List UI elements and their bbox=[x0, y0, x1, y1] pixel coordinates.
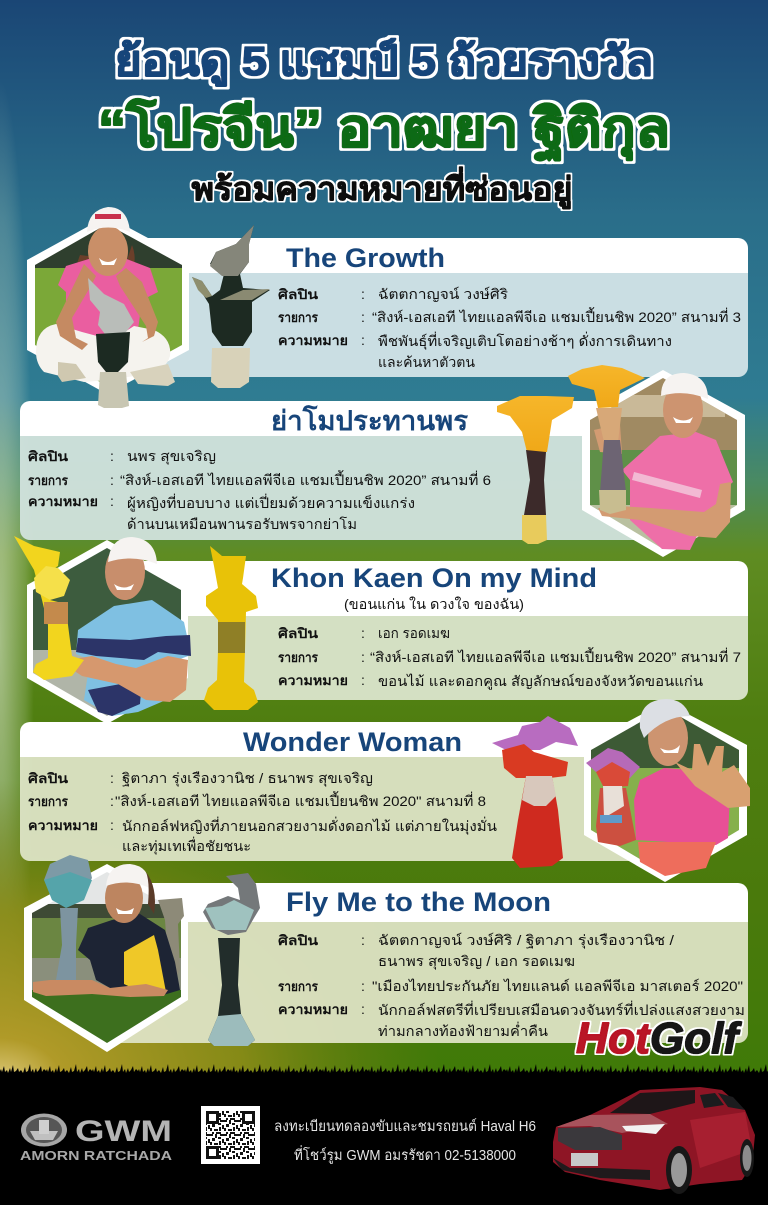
logo: GWM Amorn Ratchada: AMORN RATCHADA bbox=[20, 1149, 172, 1163]
details: : bbox=[361, 978, 365, 994]
details: ความหมาย bbox=[278, 1002, 348, 1017]
registration text: ที่โชว์รูม GWM อมรรัชดา 02-5138000 bbox=[294, 1145, 516, 1164]
details: “สิงห์-เอสเอที ไทยแอลพีจีเอ แชมเปี้ยนชิพ 2020” สนามที่ 3 bbox=[372, 307, 741, 325]
photo: golfer seated with trophy bbox=[27, 207, 189, 408]
details: : bbox=[110, 448, 114, 464]
registration text: ลงทะเบียนทดลองขับและชมรถยนต์ Haval H6 bbox=[274, 1118, 536, 1135]
subheading: (ขอนแก่น ใน ดวงใจ ของฉัน) bbox=[344, 596, 524, 612]
details: ศิลปิน bbox=[278, 287, 319, 302]
details: รายการ bbox=[278, 650, 319, 665]
panel: Khon Kaen On my Mind bbox=[110, 561, 748, 700]
details: : bbox=[361, 309, 365, 325]
details: และทุ่มเทเพื่อชัยชนะ bbox=[122, 837, 251, 855]
details: ศิลปิน bbox=[278, 933, 319, 948]
details: : bbox=[361, 286, 365, 302]
QR code bbox=[201, 1106, 260, 1164]
details: ศิลปิน bbox=[278, 626, 319, 641]
logo: HotGolf bbox=[576, 1014, 742, 1063]
details: : bbox=[361, 332, 365, 348]
details: ศิลปิน bbox=[28, 771, 69, 786]
trophy: ย่าโมประทานพร bbox=[497, 396, 574, 544]
details: ความหมาย bbox=[278, 673, 348, 688]
panel: ย่าโมประทานพร bbox=[20, 401, 650, 540]
title bbox=[98, 38, 670, 210]
car: Haval H6 bbox=[553, 1087, 755, 1194]
details bbox=[278, 286, 741, 370]
details: : bbox=[361, 625, 365, 641]
details: "สิงห์-เอสเอที ไทยแอลพีจีเอ แชมเปี้ยนชิพ 2020" สนามที่ 8 bbox=[115, 791, 486, 809]
details bbox=[278, 625, 741, 690]
details: ท่ามกลางท้องฟ้ายามค่ำคืน bbox=[378, 1022, 548, 1039]
details: ผู้หญิงที่บอบบาง แต่เปี่ยมด้วยความแข็งแกร่ง bbox=[127, 494, 415, 512]
heading: Fly Me to the Moon bbox=[286, 887, 551, 917]
details: "เมืองไทยประกันภัย ไทยแลนด์ แอลพีจีเอ มาสเตอร์ 2020" bbox=[372, 978, 743, 994]
registration text bbox=[274, 1118, 536, 1164]
details: รายการ bbox=[278, 979, 319, 994]
trophy: Khon Kaen bbox=[204, 546, 258, 710]
details: ความหมาย bbox=[28, 494, 98, 509]
details: ฉัตตกาญจน์ วงษ์ศิริ bbox=[378, 286, 509, 302]
details: ความหมาย bbox=[278, 333, 348, 348]
details bbox=[28, 448, 491, 532]
details: ความหมาย bbox=[28, 818, 98, 833]
heading: The Growth bbox=[286, 243, 445, 273]
details bbox=[278, 932, 745, 1039]
grass edge bbox=[0, 1062, 768, 1076]
details: : bbox=[361, 649, 365, 665]
Golf wordmark: Golf bbox=[650, 1014, 742, 1063]
details: : bbox=[110, 770, 114, 786]
details: : bbox=[110, 817, 114, 833]
footer bbox=[0, 1062, 768, 1205]
photo: golfer showing four fingers bbox=[584, 699, 750, 883]
details: เอก รอดเมฆ bbox=[378, 625, 450, 641]
title line 3: พร้อมความหมายที่ซ่อนอยู่ bbox=[192, 166, 572, 210]
details: : bbox=[110, 493, 114, 509]
heading: Wonder Woman bbox=[243, 727, 462, 757]
details: รายการ bbox=[278, 310, 319, 325]
details: ด้านบนเหมือนพานรอรับพรจากย่าโม bbox=[127, 516, 357, 532]
details: ธนาพร สุขเจริญ / เอก รอดเมฆ bbox=[378, 953, 575, 970]
title line 1: ย้อนดู 5 แชมป์ 5 ถ้วยรางวัล bbox=[115, 38, 653, 87]
photo: golfer with yellow trophy in blue shirt bbox=[14, 536, 191, 730]
logo: GWM Amorn Ratchada bbox=[20, 1114, 172, 1163]
details: พืชพันธุ์ที่เจริญเติบโตอย่างช้าๆ ดั่งการเดินทาง bbox=[378, 332, 672, 350]
details: รายการ bbox=[28, 794, 69, 809]
logo: GWM Amorn Ratchada: GWM bbox=[75, 1115, 172, 1148]
details: ฐิตาภา รุ่งเรืองวานิช / ธนาพร สุขเจริญ bbox=[122, 770, 373, 787]
details: นักกอล์ฟสตรีที่เปรียบเสมือนดวงจันทร์ที่เปล่งแสงสวยงาม bbox=[378, 1001, 745, 1018]
heading: Khon Kaen On my Mind bbox=[271, 563, 597, 593]
heading: ย่าโมประทานพร bbox=[271, 404, 469, 436]
details bbox=[28, 770, 497, 855]
photo: golfer lying on grass bbox=[24, 855, 189, 1052]
details: ฉัตตกาญจน์ วงษ์ศิริ / ฐิตาภา รุ่งเรืองวานิช / bbox=[378, 932, 674, 949]
title line 2: “โปรจีน” อาฒยา ฐิติกุล bbox=[98, 97, 670, 162]
details: : bbox=[110, 793, 114, 809]
trophy: Wonder Woman bbox=[492, 716, 578, 868]
Hot wordmark: Hot bbox=[576, 1014, 652, 1063]
panel: Wonder Woman bbox=[20, 722, 650, 861]
panel: The Growth bbox=[110, 238, 748, 377]
details: ศิลปิน bbox=[28, 449, 69, 464]
details: : bbox=[361, 1001, 365, 1017]
details: “สิงห์-เอสเอที ไทยแอลพีจีเอ แชมเปี้ยนชิพ 2020” สนามที่ 6 bbox=[120, 470, 491, 488]
panel: Fly Me to the Moon bbox=[110, 883, 748, 1043]
photo: golfer with yellow trophy bbox=[568, 365, 747, 557]
details: : bbox=[361, 932, 365, 948]
details: นพร สุขเจริญ bbox=[127, 448, 216, 465]
trophy: Fly Me to the Moon bbox=[203, 873, 260, 1046]
details: รายการ bbox=[28, 473, 69, 488]
details: นักกอล์ฟหญิงที่ภายนอกสวยงามดั่งดอกไม้ แต่ภายในมุ่งมั่น bbox=[122, 817, 497, 835]
details: ขอนไม้ และดอกคูณ สัญลักษณ์ของจังหวัดขอนแก่น bbox=[378, 673, 703, 690]
details: “สิงห์-เอสเอที ไทยแอลพีจีเอ แชมเปี้ยนชิพ 2020” สนามที่ 7 bbox=[370, 647, 741, 665]
details: : bbox=[361, 672, 365, 688]
details: : bbox=[110, 472, 114, 488]
trophy: The Growth bbox=[192, 225, 270, 388]
details: และค้นหาตัวตน bbox=[378, 354, 475, 370]
